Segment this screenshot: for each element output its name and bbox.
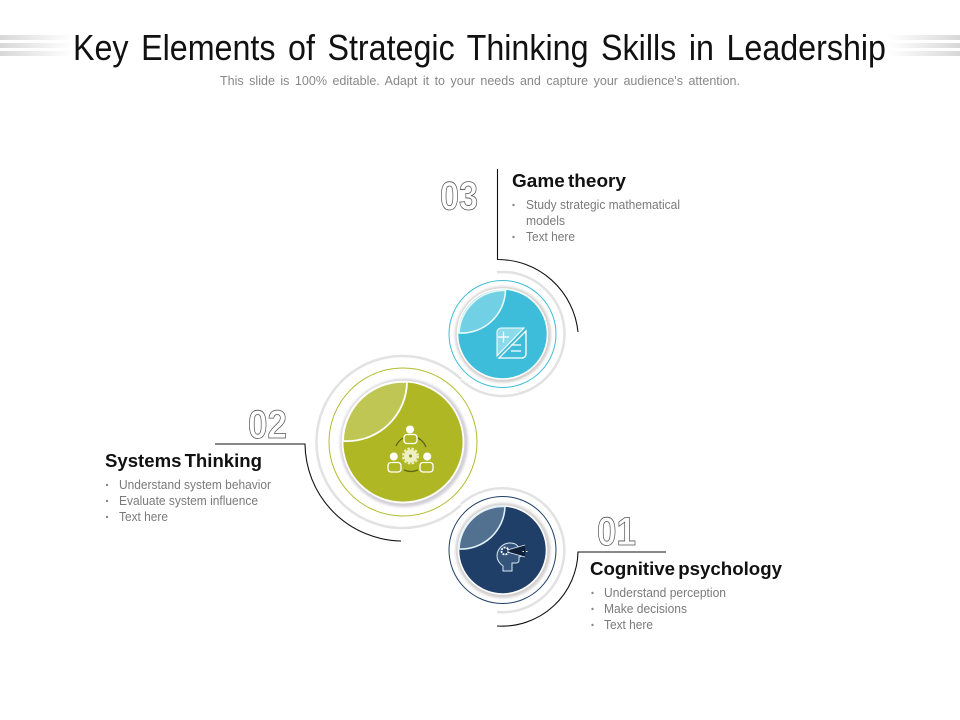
outer ring 02 xyxy=(316,356,461,528)
left title stripes xyxy=(0,35,72,56)
connector line 03 xyxy=(498,169,578,332)
step 01: cognitive psychology xyxy=(449,488,783,632)
connector line 02 xyxy=(215,444,401,541)
highlight sector 02 xyxy=(343,382,407,441)
bullets game theory: Text here xyxy=(526,229,575,244)
disc 03 xyxy=(458,289,548,379)
thin ring 02 xyxy=(329,368,477,516)
disc shadow 02 xyxy=(340,379,468,507)
heading game theory: Game theory xyxy=(512,170,627,191)
number 01: 01 xyxy=(597,510,636,554)
title: Key Elements of Strategic Thinking Skills in Leadership xyxy=(73,27,886,68)
step 02: systems thinking xyxy=(105,356,477,541)
bullets systems thinking: Text here xyxy=(119,509,168,524)
disc 02 xyxy=(342,382,464,502)
heading cognitive psychology: Cognitive psychology xyxy=(590,558,783,579)
right title stripes xyxy=(888,35,960,56)
highlight sector 03 xyxy=(459,290,506,333)
disc shadow 03 xyxy=(455,286,551,382)
bullets cognitive psychology: Make decisions xyxy=(604,601,687,616)
thin ring 03 xyxy=(449,280,556,388)
bullets game theory: Study strategic mathematical xyxy=(526,197,680,212)
outer ring 03 xyxy=(461,272,565,396)
disc 01 xyxy=(458,506,546,594)
outer ring 01 xyxy=(461,488,564,612)
disc shadow 01 xyxy=(456,503,550,598)
thin ring 01 xyxy=(449,496,556,604)
icon: calculator xyxy=(497,328,526,358)
bullets cognitive psychology: Understand perception xyxy=(604,585,726,600)
subtitle: This slide is 100% editable. Adapt it to your needs and capture your audience's attention. xyxy=(220,74,740,88)
bullets systems thinking: Evaluate system influence xyxy=(119,493,258,508)
icon: head with gear xyxy=(497,543,528,571)
bullets game theory xyxy=(512,197,680,244)
bullets cognitive psychology: Text here xyxy=(604,617,653,632)
step 03: game theory xyxy=(440,169,680,396)
connector line 01 xyxy=(497,552,666,626)
highlight sector 01 xyxy=(459,506,505,549)
number 02: 02 xyxy=(248,403,287,447)
bullets cognitive psychology xyxy=(591,585,726,632)
number 03: 03 xyxy=(440,174,478,218)
bullets systems thinking: Understand system behavior xyxy=(119,477,272,492)
heading systems thinking: Systems Thinking xyxy=(105,450,262,471)
bullets game theory: models xyxy=(526,213,565,228)
bullets systems thinking xyxy=(106,477,272,524)
icon: team with gear xyxy=(388,426,433,472)
